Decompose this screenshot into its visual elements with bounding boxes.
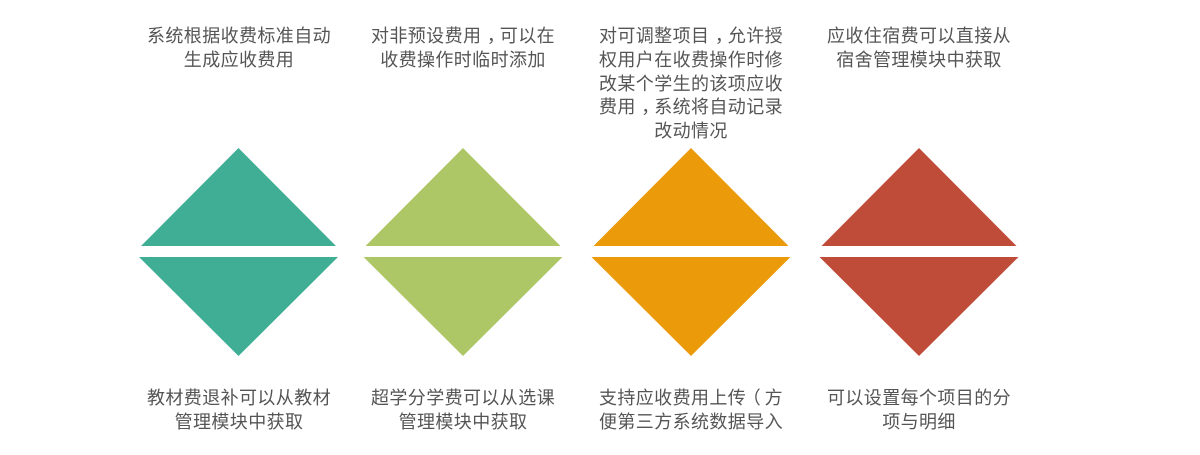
text: adjustable items: 权用户在收费操作时修 xyxy=(599,50,783,70)
text: item breakdown: 可以设置每个项目的分 xyxy=(827,388,1011,408)
text: upload support xyxy=(599,388,783,432)
text: item breakdown xyxy=(827,388,1011,432)
text: adjustable items: 对可调整项目 ，允许授 xyxy=(599,26,783,46)
text: adjustable items: 费用 ，系统将自动记录 xyxy=(599,97,783,117)
text: accommodation fees: 宿舍管理模块中获取 xyxy=(836,50,1002,70)
text: textbook refunds: 管理模块中获取 xyxy=(175,412,303,432)
text: temporary fees xyxy=(371,26,555,70)
text: textbook refunds xyxy=(147,388,331,432)
text: item breakdown: 项与明细 xyxy=(882,412,956,432)
text: accommodation fees: 应收住宿费可以直接从 xyxy=(827,26,1011,46)
text: adjustable items: 改某个学生的该项应收 xyxy=(599,74,783,94)
text: excess credit tuition: 管理模块中获取 xyxy=(399,412,527,432)
text: textbook refunds: 教材费退补可以从教材 xyxy=(147,388,331,408)
text: temporary fees: 对非预设费用 ，可以在 xyxy=(371,26,555,46)
text: excess credit tuition xyxy=(371,388,555,432)
text: excess credit tuition: 超学分学费可以从选课 xyxy=(371,388,555,408)
text: automatic fee generation: 生成应收费用 xyxy=(184,50,294,70)
text: adjustable items: 改动情况 xyxy=(654,121,728,141)
icon: orange diamond xyxy=(592,148,790,356)
icon: teal diamond xyxy=(139,148,338,356)
icon: green diamond xyxy=(364,148,562,356)
text: accommodation fees xyxy=(827,26,1011,70)
text: upload support: 便第三方系统数据导入 xyxy=(599,412,783,432)
text: upload support: 支持应收费用上传（方 xyxy=(599,388,783,408)
text: automatic fee generation xyxy=(147,26,331,70)
text: automatic fee generation: 系统根据收费标准自动 xyxy=(147,26,331,46)
text: temporary fees: 收费操作时临时添加 xyxy=(380,50,546,70)
icon: red diamond xyxy=(820,148,1018,356)
text: adjustable items xyxy=(599,26,783,141)
